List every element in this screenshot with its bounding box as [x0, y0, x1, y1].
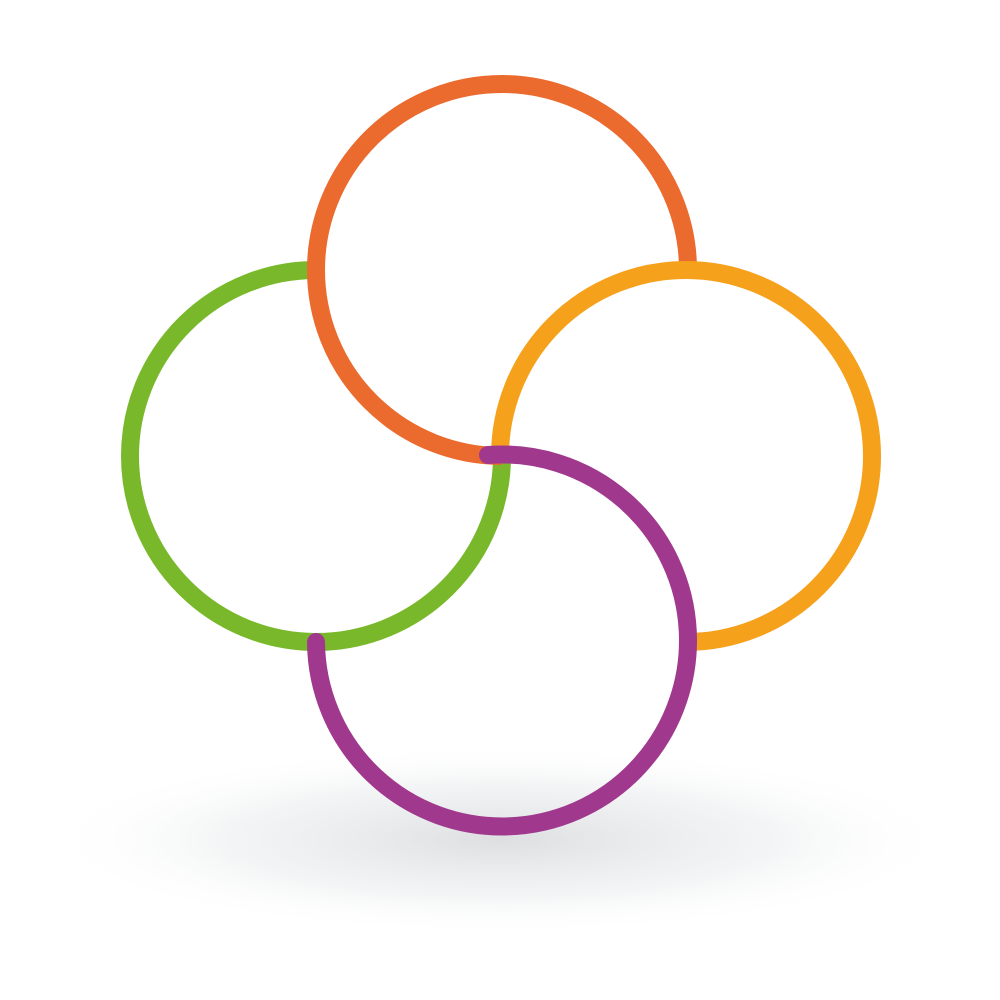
shadow	[40, 745, 960, 935]
ring: yellow	[500, 270, 872, 642]
ring: purple	[316, 454, 688, 826]
ring: green	[130, 270, 502, 642]
ring: orange	[316, 84, 688, 456]
